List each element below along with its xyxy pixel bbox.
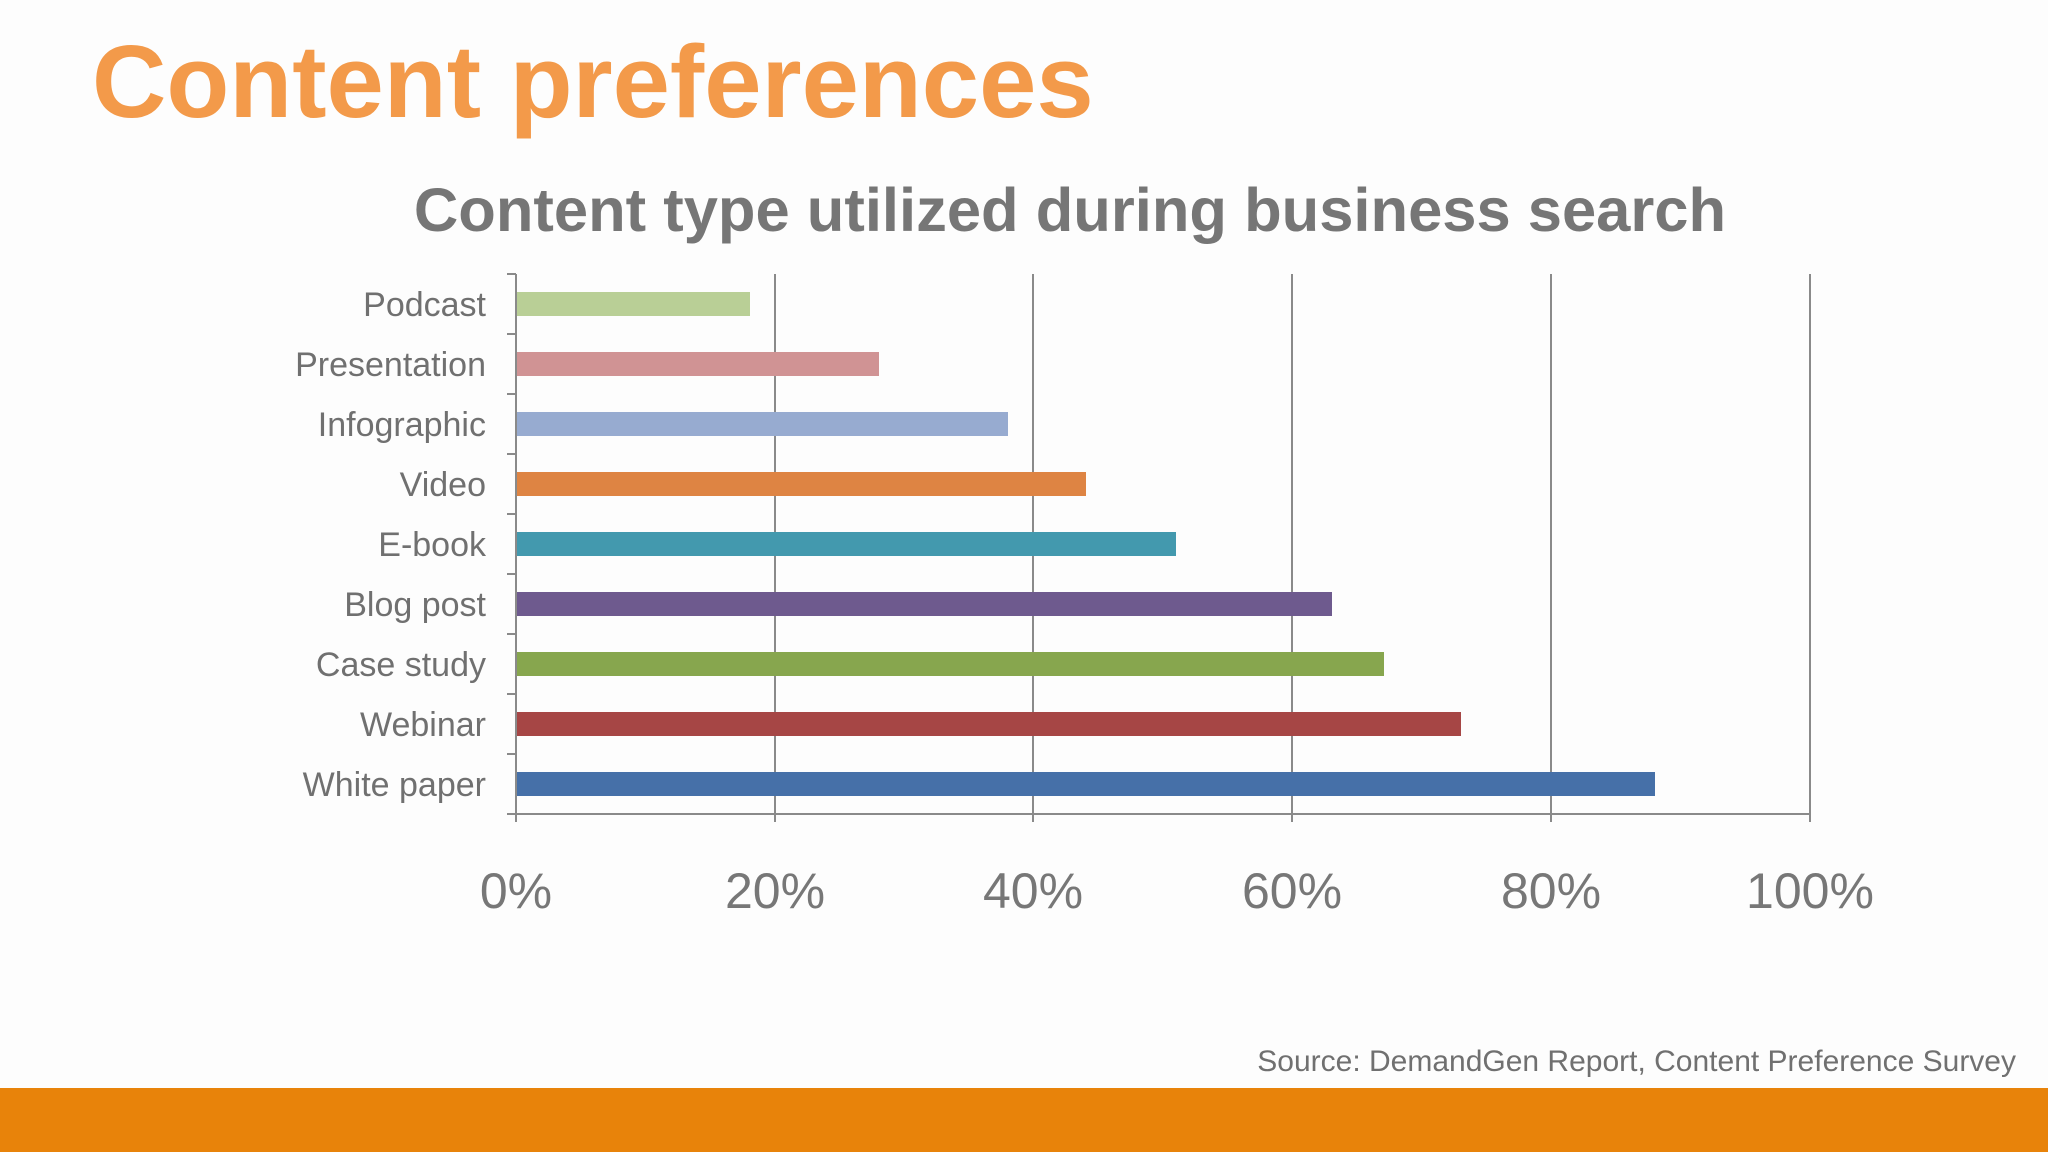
bar chart: Video — [400, 466, 486, 504]
bar chart: 60% — [1242, 863, 1342, 919]
chart subtitle: Content type utilized during business search — [414, 176, 1726, 245]
bar chart: Case study — [316, 646, 486, 684]
bar chart: E-book — [378, 526, 487, 564]
bar chart: Infographic — [318, 406, 486, 444]
bar chart: 80% — [1501, 863, 1601, 919]
bar chart: White paper — [303, 766, 486, 804]
bar chart: Blog post — [344, 586, 487, 624]
footer bar — [0, 1088, 2048, 1152]
bar chart: Podcast — [363, 286, 487, 324]
bar chart: Webinar — [360, 706, 486, 744]
bar chart: Presentation — [295, 346, 486, 384]
source note: Source: DemandGen Report, Content Preference Survey — [1257, 1045, 2016, 1078]
bar chart: 40% — [983, 863, 1083, 919]
title: Content preferences — [92, 24, 1094, 139]
bar chart: 0% — [480, 863, 552, 919]
bar chart: 20% — [725, 863, 825, 919]
bar chart: 100% — [1746, 863, 1874, 919]
